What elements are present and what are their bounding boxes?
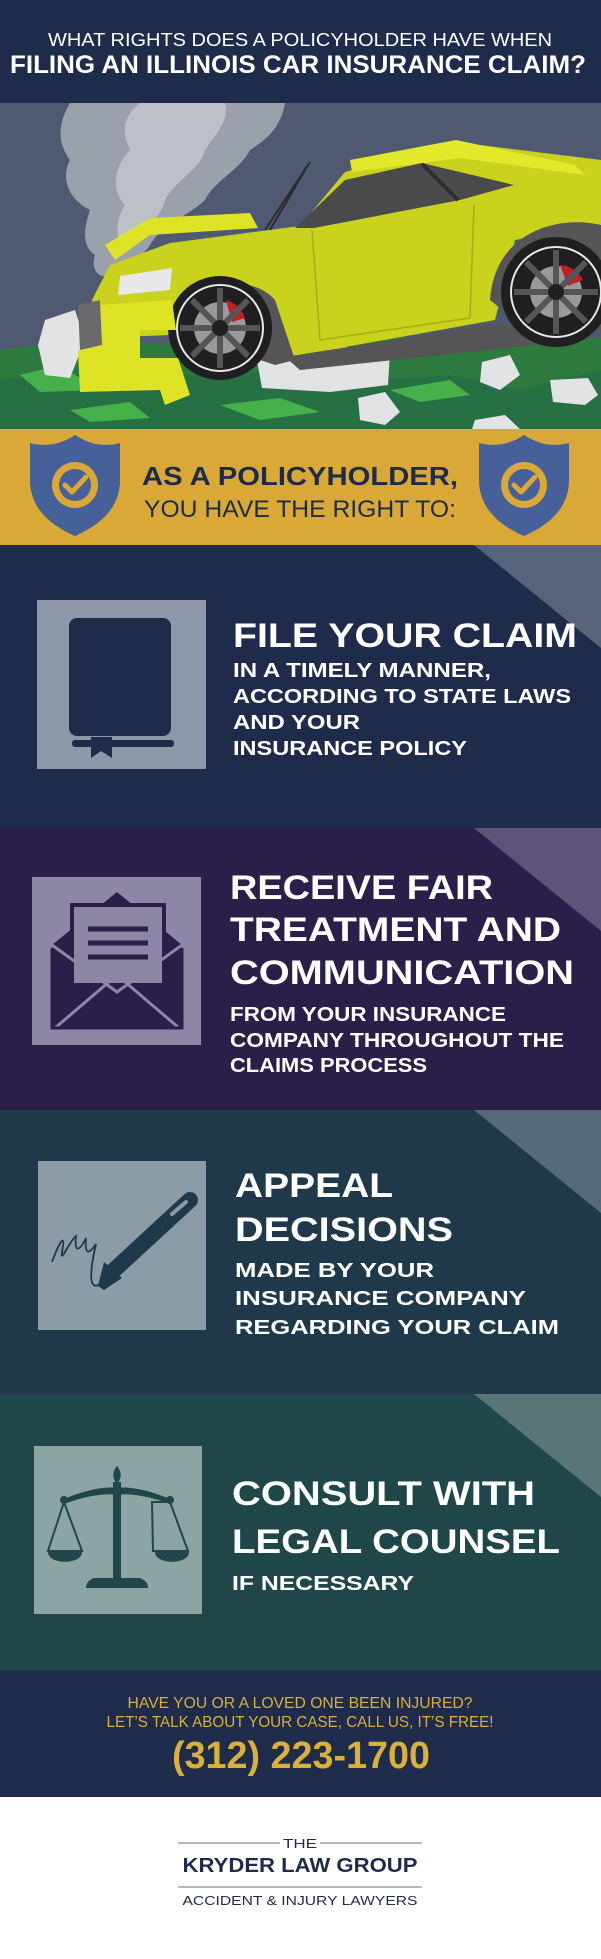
sill: [285, 323, 540, 370]
text: consult: IF NECESSARY: [232, 1573, 415, 1595]
logo: THE: [283, 1836, 317, 1851]
text: fair treatment: COMPANY THROUGHOUT THE: [230, 1030, 564, 1052]
icon: pen: [38, 1161, 206, 1330]
front wheel arch: [170, 283, 295, 365]
panel: appeal decisions: [0, 1110, 601, 1394]
text: appeal decisions: APPEAL: [235, 1167, 393, 1205]
panel: fair treatment: [0, 828, 601, 1110]
icon: book: [37, 600, 206, 769]
text: consult: [232, 1475, 560, 1595]
text: fair treatment: RECEIVE FAIR: [230, 869, 493, 907]
window: [295, 163, 514, 228]
door line: [312, 205, 474, 340]
text: appeal decisions: REGARDING YOUR CLAIM: [235, 1317, 559, 1339]
banner: policyholder: [0, 429, 601, 545]
heading text: [142, 461, 458, 523]
panel: file your claim: [0, 545, 601, 828]
text: file your claim: IN A TIMELY MANNER,: [233, 660, 491, 682]
icon: shield right: [479, 435, 569, 536]
callout: contact: HAVE YOU OR A LOVED ONE BEEN INJURED?: [128, 1695, 473, 1712]
text: consult: CONSULT WITH: [232, 1475, 535, 1513]
heading text: AS A POLICYHOLDER,: [142, 461, 458, 491]
callout: contact: (312) 223-1700: [172, 1735, 430, 1777]
text: appeal decisions: MADE BY YOUR: [235, 1260, 435, 1282]
icon: envelope: [32, 877, 201, 1045]
text: appeal decisions: DECISIONS: [235, 1211, 453, 1249]
header: FILING AN ILLINOIS CAR INSURANCE CLAIM?: [10, 51, 586, 79]
text: fair treatment: CLAIMS PROCESS: [230, 1055, 427, 1077]
text: fair treatment: COMMUNICATION: [230, 954, 574, 992]
logo: [178, 1836, 422, 1908]
text: consult: LEGAL COUNSEL: [232, 1523, 560, 1561]
text: file your claim: AND YOUR: [233, 712, 361, 734]
front wheel: [168, 276, 272, 380]
headlight + bumper: [118, 268, 172, 295]
text: file your claim: ACCORDING TO STATE LAWS: [233, 686, 571, 708]
callout: contact: [0, 1670, 601, 1797]
panel: consult legal counsel: [0, 1394, 601, 1670]
text: fair treatment: TREATMENT AND: [230, 911, 561, 949]
logo: KRYDER LAW GROUP: [182, 1855, 418, 1877]
text: appeal decisions: [235, 1167, 559, 1339]
icon: shield left: [30, 435, 120, 536]
rear wheel arch + wheel: [490, 222, 601, 347]
callout: contact: LET’S TALK ABOUT YOUR CASE, CALL US, IT’S FREE!: [106, 1714, 494, 1731]
icon: scales: [34, 1446, 202, 1614]
heading text: YOU HAVE THE RIGHT TO:: [144, 496, 456, 523]
car body: [92, 142, 601, 357]
text: appeal decisions: INSURANCE COMPANY: [235, 1288, 527, 1310]
header: [0, 0, 601, 103]
header: WHAT RIGHTS DOES A POLICYHOLDER HAVE WHEN: [48, 30, 552, 50]
smoke: [61, 103, 285, 276]
grass: [0, 337, 601, 429]
illustration: crashed car: [0, 103, 601, 429]
text: fair treatment: [230, 869, 574, 1077]
rocks: [38, 310, 598, 429]
text: fair treatment: FROM YOUR INSURANCE: [230, 1004, 506, 1026]
crumpled hood: [105, 213, 258, 260]
text: file your claim: [233, 617, 577, 760]
text: file your claim: FILE YOUR CLAIM: [233, 617, 577, 655]
text: file your claim: INSURANCE POLICY: [233, 738, 468, 760]
logo: ACCIDENT & INJURY LAWYERS: [182, 1893, 418, 1908]
